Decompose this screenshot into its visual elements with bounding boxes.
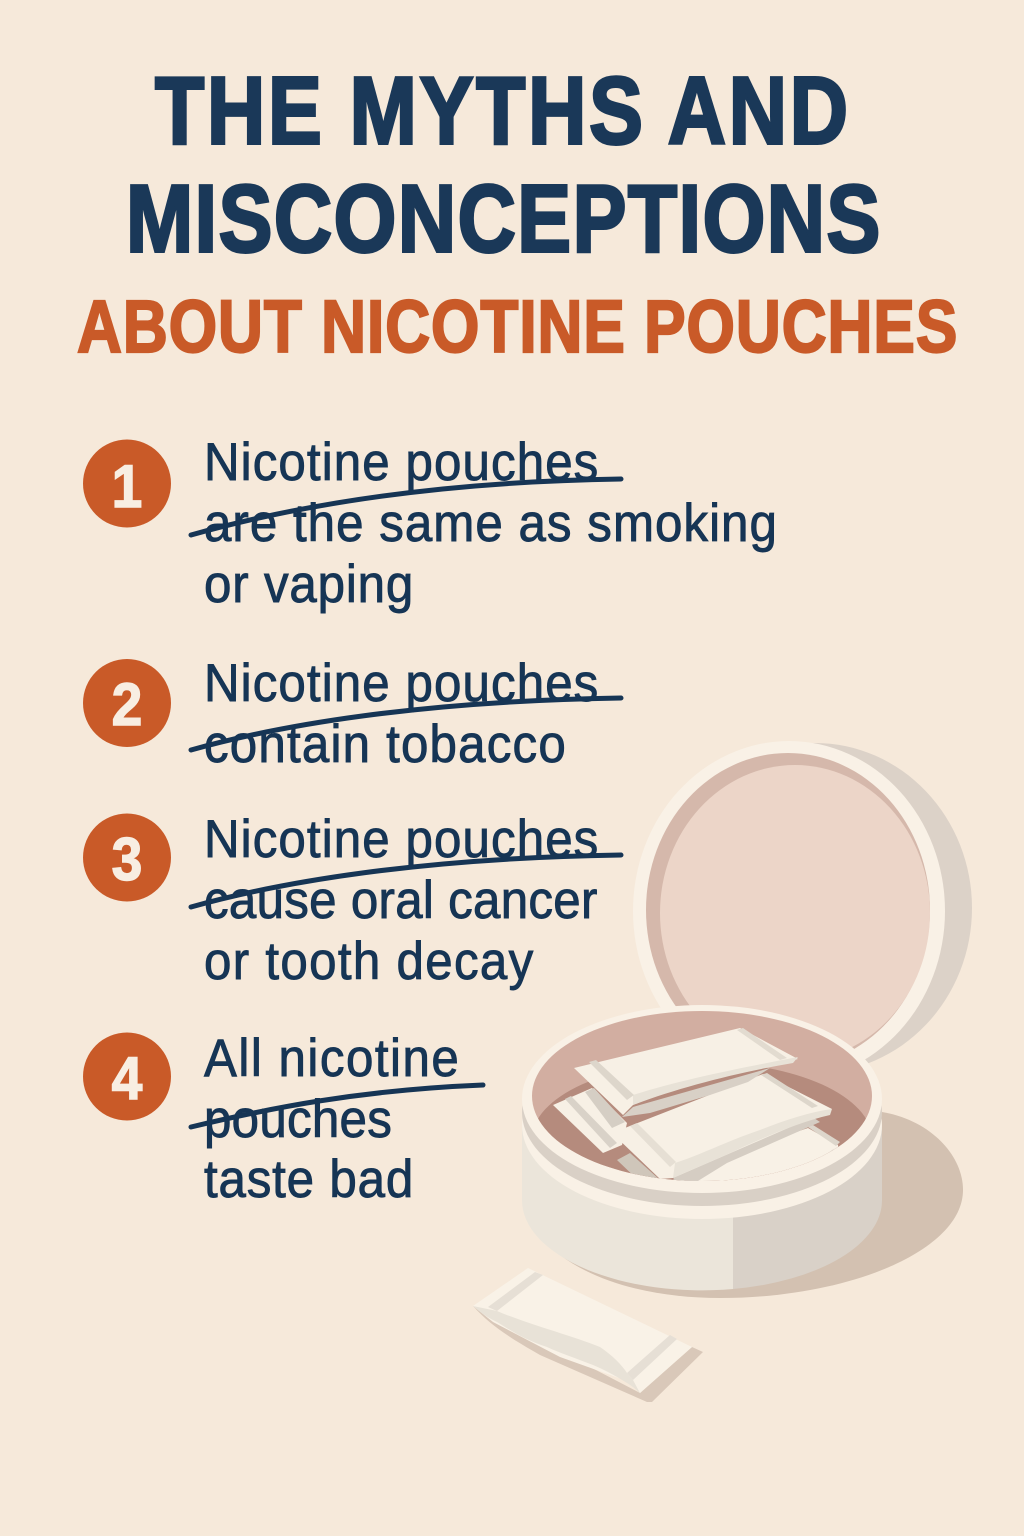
pouch: top [574, 1028, 798, 1117]
strike 1 [191, 479, 621, 535]
badge 3 [83, 814, 171, 902]
myth 1 [83, 432, 777, 613]
myth 3 text: cause oral cancer [204, 870, 597, 929]
pouch: bottom right [617, 1125, 840, 1181]
badge 2: 2 [112, 672, 142, 739]
myth 4 text: taste bad [204, 1149, 413, 1208]
badge 4 [83, 1032, 171, 1120]
badge 1 [83, 440, 171, 528]
myth 2 [83, 653, 621, 773]
myth 4 [83, 1028, 483, 1208]
myth 1 text: or vaping [204, 554, 413, 613]
myth 2 text: contain tobacco [204, 714, 566, 773]
myth 1 text [204, 432, 777, 613]
myth 3 text [204, 809, 598, 990]
myth 4 text: pouches [204, 1089, 392, 1148]
title [126, 57, 880, 272]
myth 3 [83, 809, 621, 990]
title: MISCONCEPTIONS [126, 165, 880, 272]
loose pouch [473, 1268, 703, 1402]
myth 2 text: Nicotine pouches [204, 653, 598, 712]
lid [633, 741, 972, 1081]
strike 3 [191, 855, 621, 907]
myth 1 text: Nicotine pouches [204, 432, 598, 491]
badge 1: 1 [112, 454, 142, 521]
myth 3 text: or tooth decay [204, 931, 534, 990]
strike 2 [191, 698, 621, 750]
illustration: nicotine pouch tin [83, 432, 972, 1402]
subtitle: ABOUT NICOTINE POUCHES [77, 286, 957, 368]
myth 2 text [204, 653, 598, 773]
pouch: middle [612, 1073, 832, 1184]
tin base [522, 1005, 882, 1290]
title: THE MYTHS AND [155, 57, 848, 164]
ground shadow [560, 1112, 963, 1298]
badge 4: 4 [112, 1046, 142, 1113]
badge 3: 3 [112, 827, 142, 894]
strike 4 [191, 1085, 483, 1127]
myth 4 text: All nicotine [204, 1028, 459, 1087]
myth 3 text: Nicotine pouches [204, 809, 598, 868]
badge 2 [83, 659, 171, 747]
pouch: left [553, 1088, 627, 1153]
myth 4 text [204, 1028, 459, 1208]
myth 1 text: are the same as smoking [204, 493, 777, 552]
